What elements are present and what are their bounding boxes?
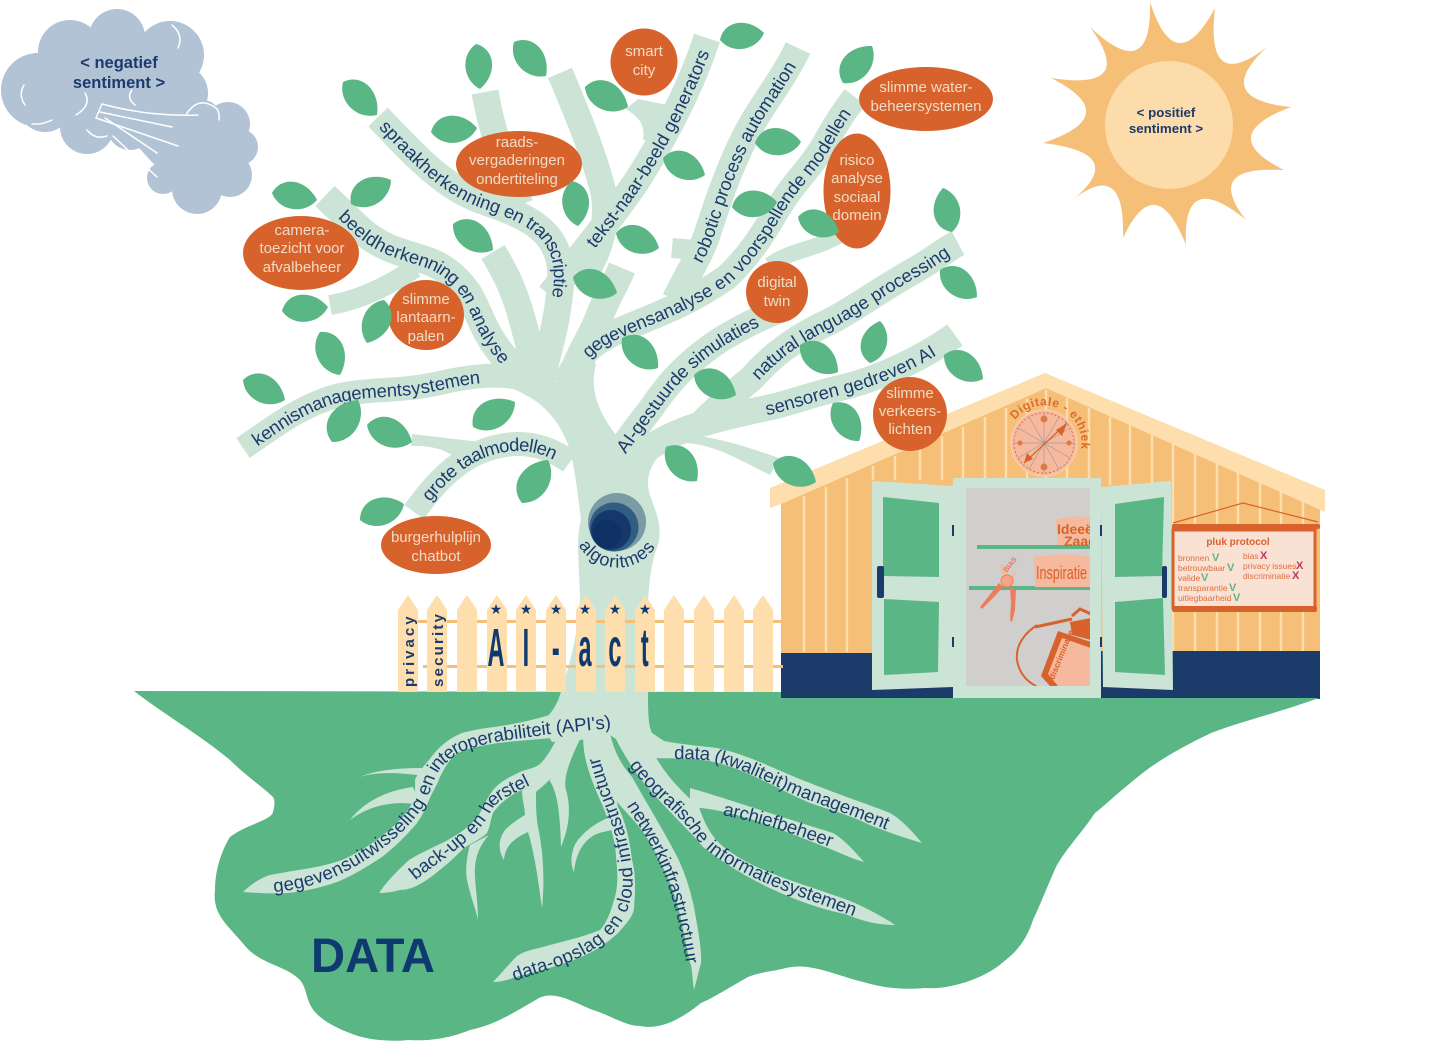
bubble: burgerhulplijn chatbot [381, 516, 491, 574]
trunk base [540, 690, 670, 760]
door frame [953, 478, 1101, 698]
fence stars: ★ [550, 602, 562, 618]
label: beeldherkenning en analyse: beeldherkenning en analyse [338, 209, 507, 363]
sun label: sentiment > [1129, 121, 1203, 136]
risks list: privacy issues [1243, 561, 1296, 571]
bubble: cameratoezicht: toezicht voor [259, 240, 345, 257]
bubble: raadsvergaderingen: ondertiteling [476, 171, 558, 188]
sun: positief sentiment [1043, 2, 1291, 245]
tree [243, 38, 958, 710]
fence: AI-act [398, 595, 783, 692]
can: inspiratie: Inspiratie [1036, 563, 1087, 583]
can: ideeen zaad: Zaad [1064, 533, 1097, 549]
rootlets: fine roots [466, 735, 612, 920]
label: data (kwaliteit)management: data (kwaliteit)management [674, 746, 890, 830]
leaves [237, 19, 991, 532]
fence text: security: security [430, 612, 447, 687]
root shape: back-up en herstel [379, 733, 580, 893]
risks list [1243, 550, 1304, 582]
wheel label: Digitale - ethiek [1010, 397, 1090, 449]
bubble: cameratoezicht: camera- [274, 222, 330, 239]
can: ideeen zaad: Ideeën [1057, 521, 1101, 537]
bubble: raadsvergaderingen: raads- [496, 134, 538, 151]
board title: pluk protocol [1206, 537, 1270, 548]
label: gegevensuitwisseling: gegevensuitwisseling en interoperabiliteit (API's) [274, 715, 610, 896]
label: spraakherkenning en transcriptie: spraakherkenning en transcriptie [380, 122, 567, 297]
root shape: data-opslag [493, 733, 635, 982]
branch labels [250, 50, 950, 502]
label: archiefbeheer: archiefbeheer [724, 806, 834, 846]
label: back-up en herstel: back-up en herstel [408, 774, 530, 880]
bubble: cameratoezicht: afvalbeheer [263, 259, 341, 276]
bubble: cameratoezicht [243, 216, 359, 290]
can: inspiratie [1034, 554, 1090, 587]
branch shape: grote taalmodellen [414, 444, 570, 512]
branch shape: beeldherkenning [325, 196, 535, 385]
risks list: X [1260, 550, 1268, 562]
branch shape: AI-gestuurde simulaties [612, 310, 780, 462]
bubble: slimme waterbeheersystemen: slimme water- [879, 79, 973, 96]
right door [1101, 481, 1173, 690]
branch shape: lower right [640, 435, 779, 475]
bubble: burgerhulplijn chatbot: chatbot [411, 548, 461, 565]
roots [243, 690, 922, 990]
branch shape: gegevensanalyse [565, 97, 855, 385]
bubble: smart city [610, 28, 678, 96]
bubble: risico analyse [824, 134, 890, 248]
root shape: data (kwaliteit)management [625, 735, 922, 843]
bubble: risico analyse: domein [832, 207, 882, 224]
branch shape: spraakherkenning [378, 117, 561, 385]
fence text: privacy: privacy [401, 613, 418, 687]
twig: robotic [672, 248, 695, 250]
label: grote taalmodellen: grote taalmodellen [424, 438, 556, 502]
stub: gegevensanalyse [570, 268, 622, 385]
bubble: slimme verkeerslichten [873, 377, 947, 451]
bubble: digital twin: twin [764, 293, 790, 310]
bubble: burgerhulplijn chatbot: burgerhulplijn [391, 529, 481, 546]
pruner: bias: BIAS [1003, 556, 1019, 574]
branch shape: raadsvergaderingen stub [485, 92, 520, 205]
label: gegevensanalyse en voorspellende modellen: gegevensanalyse en voorspellende modellen [584, 110, 851, 360]
root labels [274, 715, 890, 980]
label: geografische informatiesystemen: geografische informatiesystemen [628, 762, 856, 916]
twig: lantaarnpalen [330, 268, 415, 305]
cloud label: < negatief [80, 54, 158, 72]
branch shape: sensoren gedreven AI [640, 335, 955, 455]
risks list: discriminatie [1243, 571, 1291, 581]
branch shape: natural language processing [700, 243, 958, 425]
bubble: slimme waterbeheersystemen: beheersystemen [871, 98, 981, 115]
fence text: AI-act: AI-act [487, 617, 649, 678]
left door [872, 481, 953, 690]
trunk [500, 335, 660, 710]
label: tekst-naar-beeld generators: tekst-naar-beeld generators [586, 50, 708, 248]
bubble: slimme lantaarnpalen: slimme [402, 291, 450, 308]
root shape: archiefbeheer [690, 788, 864, 862]
checks list: betrouwbaar [1178, 563, 1225, 573]
sun label: < positief [1137, 105, 1196, 120]
fence stars: ★ [579, 602, 591, 618]
bubble: risico analyse: analyse [831, 170, 883, 187]
root shape: geografische informatiesystemen [612, 730, 895, 925]
twigs: gegevensuitwisseling [350, 768, 425, 820]
twig: risico [770, 235, 840, 265]
twig: grote taalmodellen [411, 434, 480, 462]
branch shape: central limb [560, 73, 605, 275]
shed base [781, 651, 1320, 699]
label: robotic process automation: robotic process automation [694, 63, 796, 263]
shelves [969, 545, 1091, 590]
can: ideeen zaad [1056, 516, 1101, 549]
checks list [1178, 552, 1241, 604]
checks list: transparantie [1178, 583, 1228, 593]
checks list: V [1212, 552, 1220, 564]
root shape: netwerkinfrastructuur [590, 730, 701, 990]
data label: DATA [311, 930, 435, 983]
checks list: V [1227, 562, 1235, 574]
bubble: slimme lantaarnpalen: lantaarn- [396, 309, 456, 326]
bubble: slimme verkeerslichten: slimme [886, 385, 934, 402]
bubble: slimme lantaarnpalen [388, 280, 464, 350]
bubble: slimme verkeerslichten: lichten [888, 421, 932, 438]
hollow: algoritmes [580, 493, 654, 568]
bubble: digital twin: digital [757, 274, 797, 291]
risks list: X [1292, 570, 1300, 582]
sprayer: discriminatie: discriminatie [1047, 628, 1076, 681]
bubble: slimme verkeerslichten: verkeers- [879, 403, 941, 420]
ground: data [134, 691, 1319, 1041]
root shape: gegevensuitwisseling [243, 713, 609, 893]
fence stars: ★ [639, 602, 651, 618]
bubble: slimme lantaarnpalen: palen [408, 328, 444, 345]
checks list: V [1233, 592, 1241, 604]
bubble: risico analyse: sociaal [834, 189, 880, 206]
fence stars: ★ [490, 602, 502, 618]
bubble: slimme waterbeheersystemen [859, 67, 993, 131]
door opening interior [966, 488, 1101, 686]
cloud: negatief sentiment [1, 9, 258, 214]
branch shape: kennismanagementsystemen [243, 376, 540, 448]
bubble: digital twin [746, 261, 808, 323]
shed roof [770, 373, 1325, 512]
label: sensoren gedreven AI: sensoren gedreven AI [766, 345, 936, 415]
shed wall [781, 388, 1320, 655]
sprayer: discriminatie [1017, 609, 1091, 686]
shed [770, 373, 1325, 699]
label: AI-gestuurde simulaties: AI-gestuurde simulaties [618, 318, 759, 454]
cloud label: sentiment > [73, 74, 165, 92]
bubble: risico analyse: risico [839, 152, 875, 169]
checks list: valide [1178, 573, 1200, 583]
twig: smart city [626, 99, 672, 140]
bubble: raadsvergaderingen: vergaderingen [469, 152, 565, 169]
bubble: smart city: smart [625, 43, 664, 60]
branch shape: middle stub [493, 252, 540, 380]
label: kennismanagementsystemen: kennismanagementsystemen [250, 374, 480, 446]
risks list: X [1296, 560, 1304, 572]
checks list: bronnen [1178, 553, 1209, 563]
risks list: bias [1243, 551, 1259, 561]
fence stars [490, 602, 651, 618]
checks list: V [1229, 582, 1237, 594]
fence stars: ★ [609, 602, 621, 618]
checks list: V [1201, 572, 1209, 584]
ethics wheel [1010, 397, 1090, 476]
use-case bubbles [243, 28, 993, 574]
branch shape: tekst-naar-beeld [550, 38, 707, 295]
pruner: bias [980, 556, 1019, 622]
hollow label: algoritmes [580, 542, 654, 568]
checks list: uitlegbaarheid [1178, 593, 1232, 603]
branch shape: robotic process automation [675, 48, 798, 300]
bubble: smart city: city [633, 62, 656, 79]
label: data-opslag en cloud infrastructuur: data-opslag en cloud infrastructuur [513, 759, 633, 980]
label: natural language processing: natural language processing [752, 248, 950, 380]
fence stars: ★ [520, 602, 532, 618]
bubble: raadsvergaderingen [456, 131, 582, 197]
pluk protocol board [1172, 503, 1320, 612]
label: netwerkinfrastructuur: netwerkinfrastructuur [627, 802, 696, 962]
